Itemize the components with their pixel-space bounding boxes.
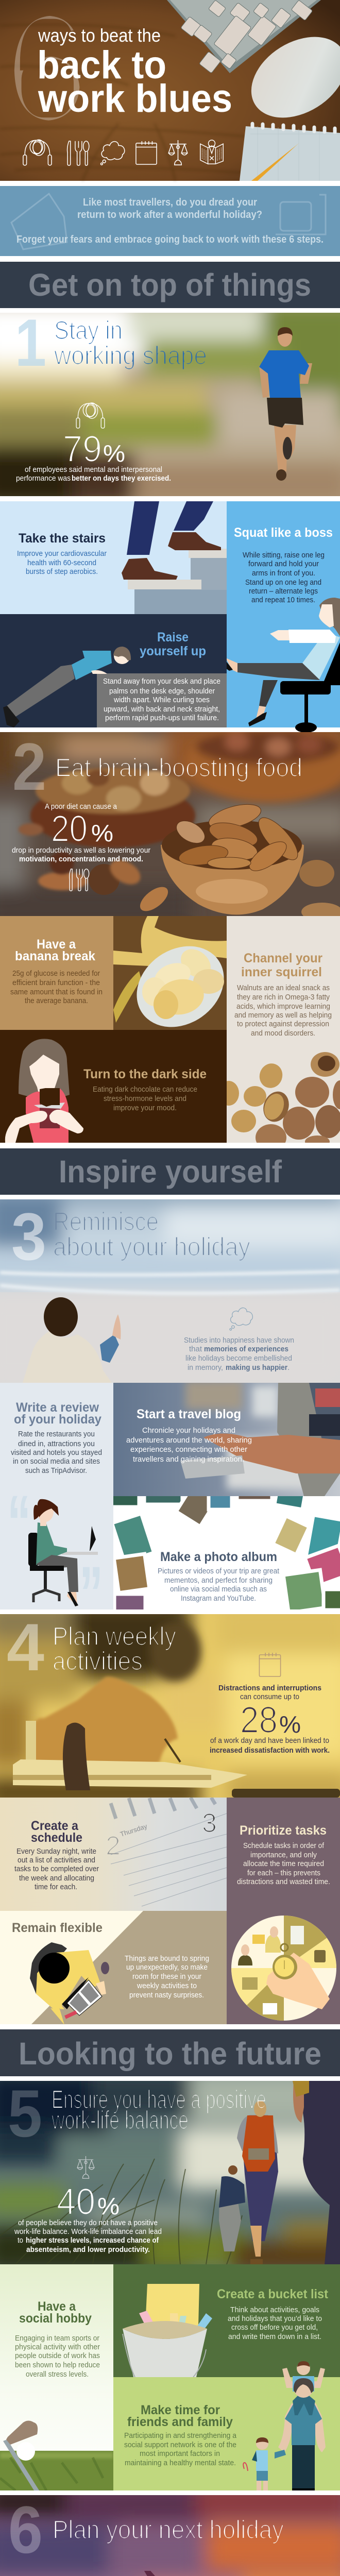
stat: 40 (57, 2181, 95, 2223)
panel: step 5 photo (0, 2071, 340, 2272)
body text: and write them down in a list. (228, 2332, 321, 2341)
body text: improve your mood. (113, 1104, 177, 1112)
body text: distractions and wasted time. (237, 1877, 330, 1886)
step number 4: 4 (7, 1609, 44, 1685)
body text: Things are bound to spring (125, 1954, 209, 1963)
heading (241, 951, 322, 979)
body text: adventures around the world, sharing (126, 1436, 252, 1445)
right bowl (185, 722, 340, 803)
heading bar: looking to the future (0, 2029, 340, 2076)
body text: for each – this prevents (247, 1869, 320, 1877)
step title: Stay in (54, 316, 123, 345)
quotation marks: ” (79, 1550, 103, 1637)
heading: social hobby (19, 2311, 92, 2326)
stat 79 percent (63, 429, 125, 470)
body text: cross off before you get old, (231, 2323, 318, 2332)
body text: Stand away from your desk and place (103, 677, 220, 686)
panel: step 1 photo (0, 305, 340, 496)
body text: Participating in and strengthening a (124, 2431, 237, 2440)
heading (14, 1400, 101, 1427)
body text: memories of experiences (204, 1345, 288, 1353)
panel: dark side (0, 1030, 227, 1143)
scattered photos (111, 1484, 340, 1615)
heading (15, 937, 95, 963)
icon: scales (77, 2156, 94, 2178)
heading: Channel your (244, 951, 322, 965)
body text (125, 1954, 209, 1999)
body text: dined in, attractions you (18, 1439, 95, 1448)
stairs photo (122, 501, 227, 614)
heading: of your holiday (14, 1412, 101, 1427)
body text: stress-hormone levels and (104, 1094, 186, 1103)
stat: 28 (240, 1700, 278, 1741)
body text: efficient brain function - the (12, 978, 100, 987)
panel: intro (0, 186, 340, 256)
stat: can consume up to (240, 1692, 299, 1701)
diary dates: 2 (106, 1831, 121, 1861)
heading bar: looking to the future: Looking to the future (19, 2036, 321, 2071)
heading: Have a (37, 937, 76, 952)
body text: acids, which improve learning (236, 1002, 330, 1011)
body text: Every Sunday night, write (16, 1847, 96, 1856)
heading: Raise (157, 630, 189, 645)
body text: the week and allocating (19, 1874, 94, 1883)
stat: % (91, 820, 113, 846)
body text: online via social media such as (170, 1585, 267, 1594)
panel: start a travel blog (113, 1383, 340, 1496)
step title: Plan your next holiday (53, 2515, 284, 2544)
body text: importance, and only (250, 1851, 317, 1859)
body text: Improve your cardiovascular (17, 549, 107, 558)
body text: travellers and gaining inspiration. (133, 1455, 244, 1464)
stat text: performance was (16, 474, 71, 483)
quotation marks (7, 1479, 103, 1637)
stat: Distractions and interruptions (218, 1684, 321, 1692)
body text: arms in front of you. (252, 569, 315, 578)
stat: motivation, concentration and mood. (19, 855, 143, 863)
stat: % (97, 2193, 120, 2219)
body text (234, 984, 332, 1038)
stat: higher stress levels, increased chance of (26, 2236, 159, 2245)
body text: making us happier (226, 1363, 287, 1372)
body text: up unexpectedly, so make (126, 1963, 208, 1972)
step title (53, 1622, 176, 1675)
title: back to (37, 43, 166, 87)
heading: Create a (31, 1819, 79, 1833)
almond bowl (161, 800, 304, 914)
body text: weekly activities to (137, 1981, 197, 1990)
panel: remain flexible (0, 1911, 227, 2025)
panel: step 4 photo (0, 1609, 340, 1798)
step title (51, 2085, 266, 2134)
body text: return – alternate legs (249, 587, 318, 596)
diary dates: Thursday (119, 1822, 148, 1838)
person in plaid shirt (180, 1383, 340, 1496)
panel: step 6 photo (0, 2486, 340, 2576)
body text: prevent nasty surprises. (129, 1991, 204, 1999)
body text: Walnuts are an ideal snack as (237, 984, 330, 992)
heading: Make a photo album (160, 1550, 277, 1564)
airplane wing (144, 2571, 340, 2576)
bucket (123, 2284, 212, 2377)
body text (243, 551, 325, 604)
stat (210, 1684, 330, 1755)
body text (11, 1430, 102, 1475)
heading: Squat like a boss (234, 526, 333, 540)
body text: to protect against depression (237, 1020, 329, 1028)
body text (14, 1847, 99, 1891)
heading: banana break (15, 949, 95, 963)
body text: and repeat 10 times. (251, 596, 315, 604)
body text: maintaining a healthy mental state. (125, 2459, 236, 2467)
body text (17, 549, 107, 576)
stat: A poor diet can cause a (45, 802, 117, 811)
icon: jump rope (76, 403, 105, 428)
heading (19, 2299, 92, 2326)
body text (93, 1085, 197, 1112)
body text (126, 1426, 252, 1464)
figure: man on beach (23, 1297, 121, 1383)
step title (54, 316, 207, 370)
quotation marks: “ (7, 1479, 31, 1566)
step title: Eat brain-boosting food (55, 753, 302, 782)
body text: that (189, 1345, 202, 1353)
panel: take the stairs (0, 501, 227, 614)
panel: step 3 photo (0, 1199, 340, 1383)
body text: Rate the restaurants you (18, 1430, 95, 1438)
body text: . (287, 1363, 290, 1372)
body text: experiences, connecting with other (130, 1445, 247, 1454)
body text: tasks to be completed over (14, 1865, 99, 1873)
step number 5: 5 (8, 2076, 42, 2151)
step title: Plan weekly (53, 1622, 176, 1651)
body text (237, 1841, 330, 1886)
step title (53, 1207, 250, 1261)
step number 6: 6 (8, 2492, 43, 2567)
hikers (219, 2081, 340, 2264)
body text: and holidays that you’d like to (228, 2314, 322, 2323)
icons: faint ticket and luggage (11, 194, 326, 249)
heading (31, 1819, 82, 1845)
panel: create a schedule (0, 1798, 227, 1911)
walnuts photo (227, 1052, 340, 1143)
body text: health with 60-second (27, 558, 96, 567)
intro text: return to work after a wonderful holiday? (77, 209, 262, 221)
heading: Turn to the dark side (83, 1067, 207, 1081)
body text: time for each. (35, 1883, 77, 1891)
text: Take the stairs (19, 531, 106, 546)
body text: physical activity with other (15, 2343, 100, 2351)
heading: friends and family (127, 2415, 233, 2429)
heading: Remain flexible (12, 1921, 103, 1935)
icon: cutlery (70, 869, 89, 891)
heading bar: inspire yourself (0, 1148, 340, 1195)
panel: friends and family (113, 2361, 340, 2490)
panel: prioritize tasks (227, 1798, 340, 2024)
stat: % (279, 1711, 301, 1738)
hand and book (13, 1676, 340, 1798)
step title: activities (53, 1647, 143, 1675)
subtitle: ways to beat the (38, 25, 161, 46)
icon: thought cloud (230, 1308, 252, 1330)
body text: width apart. While curling toes (113, 696, 210, 704)
body text: Schedule tasks in order of (243, 1841, 325, 1850)
figure: girl with chocolate (5, 1039, 83, 1143)
stat: of people believe they do not have a positive (18, 2218, 158, 2227)
diary dates (106, 1808, 217, 1861)
stat: drop in productivity as well as lowering your (12, 846, 150, 855)
panel: raise yourself up (0, 614, 227, 727)
body text: and memory as well as helping (234, 1011, 332, 1020)
body text: Eating dark chocolate can reduce (93, 1085, 197, 1094)
heading bar: get on top of things (0, 262, 340, 308)
panel: banana break (0, 916, 113, 1030)
heading: Make time for (141, 2403, 220, 2417)
body text (184, 1336, 294, 1372)
body text: Instagram and YouTube. (181, 1594, 256, 1603)
heading: inner squirrel (241, 965, 322, 979)
icon row (23, 140, 223, 165)
heading (140, 630, 206, 658)
body text: they are rich in Omega-3 fatty (237, 993, 330, 1002)
body text (228, 2306, 322, 2341)
body text: the average banana. (25, 996, 88, 1005)
body text: room for these in your (132, 1972, 201, 1981)
body text: Studies into happiness have shown (184, 1336, 294, 1345)
stat (12, 802, 150, 863)
figure: father and children (243, 2361, 326, 2490)
panel: inner squirrel (218, 916, 340, 1151)
body text: same amount that is found in (10, 988, 103, 996)
stat text (16, 465, 171, 483)
body text: allocate the time required (243, 1859, 324, 1868)
wood grain (0, 25, 247, 181)
diary dates: 3 (202, 1808, 217, 1838)
body text: and mood disorders. (251, 1029, 315, 1038)
heading: Have a (38, 2299, 76, 2314)
body text: visited and hotels you stayed (11, 1448, 102, 1457)
body text: people outside of work has (15, 2351, 100, 2360)
figure: woman at laptop (28, 1499, 98, 1606)
heading: Write a review (16, 1400, 99, 1415)
left bowl (30, 768, 195, 848)
title (37, 43, 232, 121)
golf grass (0, 2420, 113, 2490)
step title: about your holiday (53, 1232, 250, 1261)
body text: Think about activities, goals (230, 2306, 319, 2314)
panel: social hobby (0, 2264, 113, 2490)
figure: person from above (30, 1942, 109, 2025)
intro text: Like most travellers, do you dread your (83, 197, 257, 208)
body text (158, 1567, 280, 1603)
step number 3: 3 (11, 1199, 46, 1274)
notebook (240, 124, 340, 181)
step title: working shape (54, 341, 207, 370)
panel: squat like a boss (217, 501, 340, 733)
stat text: better on days they exercised. (72, 474, 171, 483)
runner (259, 327, 312, 481)
circle chart with stopwatch (231, 1916, 336, 2021)
figure: push-up man (3, 647, 131, 727)
body text: Engaging in team sports or (15, 2334, 99, 2343)
body text: most important factors in (140, 2449, 220, 2458)
stat: work-life balance. Work-life imbalance can lead (14, 2227, 162, 2236)
stat: increased dissatisfaction with work. (210, 1746, 330, 1755)
title: work blues (38, 77, 232, 121)
heading: Start a travel blog (137, 1407, 241, 1421)
stat: 20 (51, 808, 88, 850)
grass (0, 2159, 242, 2264)
body text: such as TripAdvisor. (25, 1466, 87, 1475)
stat (14, 2181, 162, 2254)
body text: social support network is one of the (124, 2441, 236, 2449)
stat: of a work day and have been linked to (210, 1736, 329, 1745)
diary page lines (111, 1814, 227, 1906)
people and task icons (238, 1926, 326, 2014)
body text (124, 2431, 237, 2467)
heading: schedule (31, 1831, 82, 1845)
mouse (236, 20, 340, 134)
body text: While sitting, raise one leg (243, 551, 325, 560)
body text: upward, with back and neck straight, (104, 705, 220, 714)
body text (103, 677, 220, 722)
panel: step 2 photo (0, 729, 340, 916)
intro text (16, 197, 324, 245)
body text: out a list of activities and (18, 1856, 95, 1865)
step number 1: 1 (15, 305, 46, 380)
body text: mementos, and perfect for sharing (164, 1576, 273, 1585)
heading: Create a bucket list (217, 2287, 329, 2301)
stat text: of employees said mental and interpersonal (25, 465, 162, 474)
body text: in on social media and sites (13, 1457, 100, 1466)
body text: in memory, (188, 1363, 223, 1372)
hero panel (0, 0, 340, 181)
heading: Prioritize tasks (240, 1823, 327, 1838)
panel: write a review (0, 1383, 113, 1637)
keyboard (167, 0, 321, 73)
heading (127, 2403, 233, 2429)
banana photo (113, 916, 227, 1030)
body text: overall stress levels. (26, 2370, 89, 2379)
figure: seated woman (217, 598, 340, 733)
body text: forward and hold your (248, 560, 319, 568)
heading bar: get on top of things: Get on top of things (28, 267, 311, 302)
icon: calendar (259, 1653, 281, 1676)
heading: yourself up (140, 644, 206, 658)
panel: bucket list (113, 2264, 340, 2377)
body text: perform rapid push-ups until failure. (105, 714, 219, 722)
step title: Reminisce (53, 1207, 159, 1236)
stat 79 percent: % (103, 440, 125, 467)
step number 2: 2 (12, 729, 46, 804)
scattered nuts (19, 823, 340, 921)
body text (10, 969, 103, 1005)
body text: 25g of glucose is needed for (12, 969, 100, 978)
stat 79 percent: 79 (63, 429, 102, 470)
body text (15, 2334, 100, 2379)
heading bar: inspire yourself: Inspire yourself (59, 1154, 282, 1189)
body text: like holidays become embellished (185, 1354, 292, 1363)
stat: to (18, 2236, 23, 2245)
body text: Stand up on one leg and (245, 578, 321, 587)
body text: been shown to help reduce (15, 2361, 100, 2369)
stat: absenteeism, and lower productivity. (26, 2245, 150, 2254)
step title: work-life balance (51, 2106, 189, 2134)
body text: Chronicle your holidays and (142, 1426, 235, 1435)
body text: bursts of step aerobics. (26, 567, 98, 576)
panel: make a photo album (113, 1496, 340, 1609)
body text: palms on the desk edge, shoulder (109, 687, 215, 696)
body text: Pictures or videos of your trip are great (158, 1567, 280, 1575)
